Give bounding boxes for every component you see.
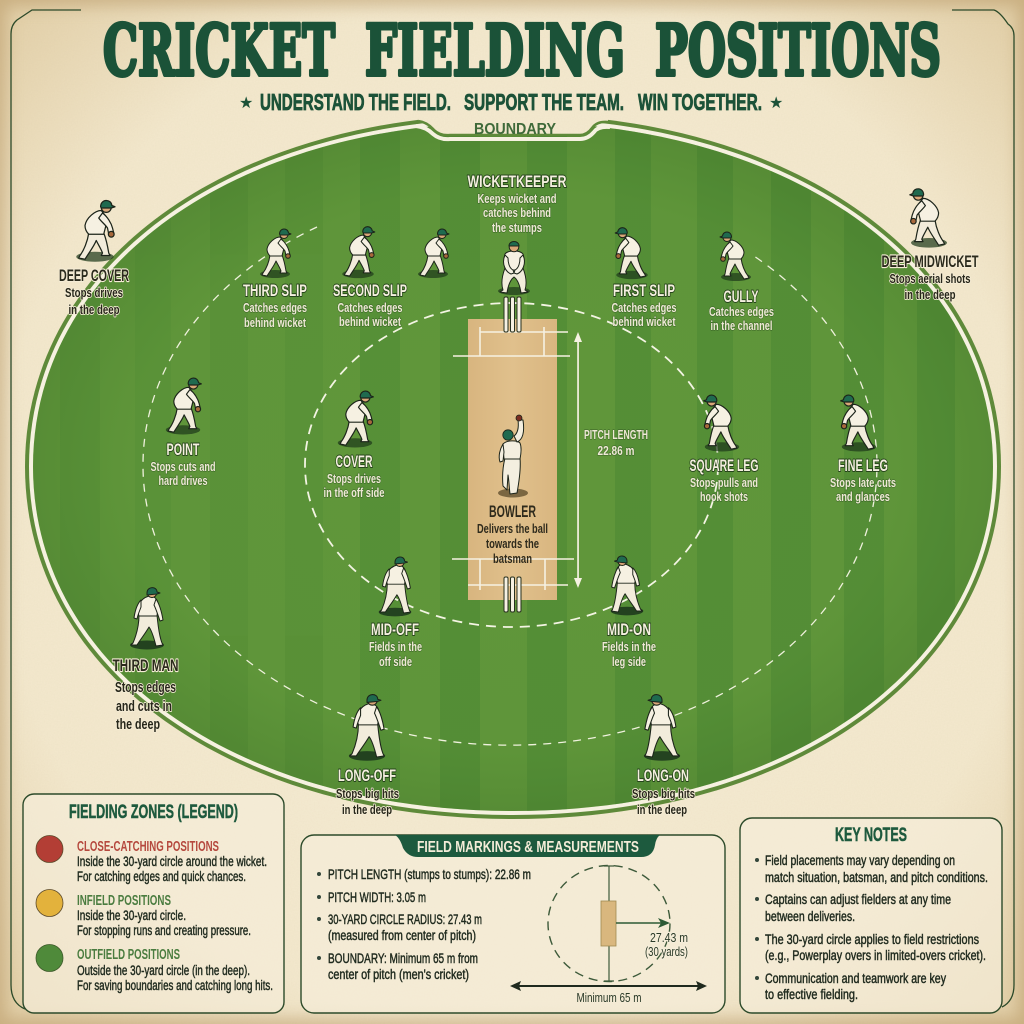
subtitle: WIN TOGETHER. [638, 89, 762, 115]
position: third man: Stops edges [115, 680, 176, 696]
position: third slip: behind wicket [244, 315, 306, 330]
grass with mown stripes [33, 126, 993, 811]
key notes list: between deliveries. [765, 909, 855, 924]
position: deep cover: in the deep [68, 302, 120, 317]
position: long-on [632, 695, 695, 817]
position: wicketkeeper: Keeps wicket and [478, 191, 557, 206]
pitch length label: 22.86 m [598, 443, 634, 458]
subtitle: ★ [239, 93, 253, 112]
position: wicketkeeper: WICKETKEEPER [468, 172, 566, 191]
key notes list: Field placements may vary depending on [765, 853, 955, 868]
position: square leg: Stops pulls and [690, 475, 758, 490]
position: long-off [336, 695, 399, 817]
measurement diagram: 27.43 m [650, 930, 688, 945]
position: long-off: Stops big hits [336, 786, 399, 801]
position: mid-on [602, 556, 656, 669]
position: long-on: in the deep [637, 802, 687, 817]
measurements list: center of pitch (men's cricket) [328, 967, 469, 982]
position: mid-off: off side [379, 654, 412, 669]
position: fine leg: Stops late cuts [830, 475, 896, 490]
crease markings [452, 327, 574, 590]
boundary notch line [416, 121, 610, 139]
panel: fielding zones legend [23, 794, 284, 1013]
boundary label: BOUNDARY [474, 121, 556, 138]
measurements list: BOUNDARY: Minimum 65 m from [328, 951, 478, 966]
position: wicketkeeper [468, 172, 566, 295]
pitch length label: PITCH LENGTH [584, 427, 648, 442]
position: mid-on: MID-ON [607, 620, 651, 639]
position: third slip: THIRD SLIP [243, 281, 307, 300]
position: second slip: Catches edges [338, 300, 402, 315]
position: fine leg: FINE LEG [838, 456, 888, 475]
key notes list: to effective fielding. [765, 987, 858, 1002]
position: point: Stops cuts and [150, 459, 216, 474]
position: first slip [612, 228, 676, 329]
position: point [150, 378, 216, 488]
measurement diagram: Minimum 65 m [576, 990, 642, 1005]
position: third man: THIRD MAN [112, 656, 178, 675]
measurement diagram [510, 866, 707, 1005]
key notes list: Captains can adjust fielders at any time [765, 892, 951, 907]
key notes list [755, 853, 988, 1002]
position: first slip: behind wicket [612, 314, 676, 329]
position: second slip: SECOND SLIP [333, 281, 407, 300]
position: bowler: Delivers the ball [477, 521, 548, 536]
position: gully: GULLY [724, 287, 759, 306]
panel header tab: FIELD MARKINGS & MEASUREMENTS [417, 839, 639, 856]
position: deep cover [59, 200, 129, 317]
position: deep cover: Stops drives [65, 285, 123, 300]
stumps: near end [504, 577, 521, 612]
legend heading: FIELDING ZONES (LEGEND) [69, 802, 238, 823]
subtitle: ★ [769, 93, 783, 112]
position: third slip [243, 229, 307, 330]
legend item: close-catching: CLOSE-CATCHING POSITIONS [77, 839, 219, 855]
position: first slip: Catches edges [612, 300, 676, 315]
legend item: infield: INFIELD POSITIONS [77, 893, 171, 909]
position: gully: Catches edges [709, 304, 774, 319]
position: third man: and cuts in [116, 699, 172, 715]
legend item: outfield: For saving boundaries and catching long hits. [77, 978, 273, 993]
position: fine leg [830, 395, 896, 504]
key notes list: Communication and teamwork are key [765, 971, 946, 986]
position: cover: COVER [336, 452, 372, 471]
unlabelled slip fielder [418, 229, 449, 278]
arrow: pitch length [574, 332, 582, 588]
legend item: outfield [36, 944, 273, 993]
subtitle: SUPPORT THE TEAM. [464, 89, 624, 115]
position: deep cover: DEEP COVER [59, 266, 129, 285]
legend item: close-catching: For catching edges and quick chances. [77, 869, 246, 884]
measurement diagram: (30 yards) [645, 944, 688, 959]
position: cover: Stops drives [327, 471, 381, 486]
position: bowler: towards the [486, 536, 539, 551]
position: deep midwicket: Stops aerial shots [890, 271, 970, 286]
key notes heading: KEY NOTES [835, 825, 907, 846]
position: mid-on: leg side [612, 654, 646, 669]
position: deep midwicket: in the deep [904, 287, 956, 302]
pitch [452, 297, 574, 612]
position: long-off: in the deep [342, 802, 392, 817]
position: third man: the deep [116, 717, 160, 733]
position: second slip: behind wicket [339, 314, 401, 329]
position: point: POINT [166, 440, 200, 459]
boundary rope [25, 114, 1001, 819]
position: mid-off [369, 557, 422, 669]
position: cover [324, 391, 384, 500]
measurements list: (measured from center of pitch) [328, 928, 476, 943]
position: bowler: BOWLER [489, 502, 536, 521]
measurements list: 30-YARD CIRCLE RADIUS: 27.43 m [328, 912, 482, 927]
position: square leg [690, 395, 758, 504]
position: square leg: SQUARE LEG [690, 456, 758, 475]
panel: key notes [740, 818, 1002, 1013]
position: point: hard drives [158, 473, 208, 488]
legend item: outfield: OUTFIELD POSITIONS [77, 947, 180, 963]
position: mid-on: Fields in the [602, 639, 656, 654]
subtitle: UNDERSTAND THE FIELD. [260, 89, 451, 115]
position: cover: in the off side [324, 485, 384, 500]
panel header tab [395, 835, 660, 857]
position: wicketkeeper: the stumps [492, 220, 542, 235]
stumps: far end [504, 297, 521, 332]
legend item: infield [36, 890, 251, 938]
position: bowler: batsman [493, 551, 532, 566]
legend item: infield: Inside the 30-yard circle. [77, 908, 186, 923]
position: deep midwicket [882, 189, 979, 302]
position: gully [709, 232, 774, 333]
title: FIELDING [365, 9, 625, 92]
position: fine leg: and glances [836, 489, 890, 504]
position: third man [112, 588, 178, 733]
measurements list: PITCH WIDTH: 3.05 m [328, 890, 426, 905]
position: first slip: FIRST SLIP [613, 281, 675, 300]
position: mid-off: Fields in the [369, 639, 422, 654]
pitch length label [584, 427, 648, 458]
title [103, 9, 941, 92]
legend item: outfield: Outside the 30-yard circle (in the deep). [77, 963, 250, 978]
legend item: close-catching: Inside the 30-yard circle around the wicket. [77, 854, 267, 869]
position: gully: in the channel [710, 318, 772, 333]
position: third slip: Catches edges [243, 300, 307, 315]
outer fielding circle [143, 227, 877, 745]
position: mid-off: MID-OFF [371, 620, 419, 639]
legend item: close-catching [36, 836, 267, 884]
position: wicketkeeper: catches behind [483, 205, 551, 220]
cricket field [0, 100, 1024, 830]
title: CRICKET [103, 9, 335, 92]
position: long-off: LONG-OFF [338, 766, 396, 785]
panel: field markings and measurements [301, 835, 725, 1013]
position: long-on: Stops big hits [632, 786, 695, 801]
position: bowler [477, 415, 548, 566]
measurements list [317, 867, 531, 982]
subtitle [239, 89, 783, 115]
position: second slip [333, 227, 407, 329]
30-yard inner circle [305, 303, 718, 627]
position: long-on: LONG-ON [637, 766, 689, 785]
legend item: infield: For stopping runs and creating pressure. [77, 923, 251, 938]
measurements list: PITCH LENGTH (stumps to stumps): 22.86 m [328, 867, 531, 882]
position: square leg: hook shots [700, 489, 748, 504]
